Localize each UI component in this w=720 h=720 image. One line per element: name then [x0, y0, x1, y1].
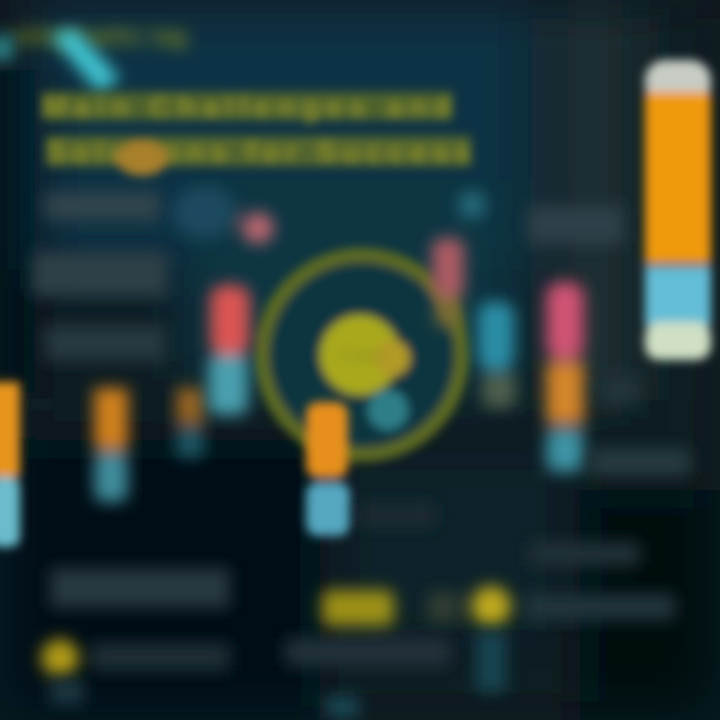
right text block: Summary	[590, 455, 658, 472]
right text block: Outcome notes	[525, 599, 634, 616]
right text block: Details	[528, 219, 577, 236]
pill: pink upper right	[432, 191, 486, 326]
title	[42, 91, 471, 176]
bottom teal marks	[50, 632, 506, 718]
title: Main Challenges and	[42, 91, 452, 124]
left text block: Key factor	[35, 265, 108, 282]
pill: second left	[94, 388, 128, 502]
left text block	[32, 192, 167, 361]
pill: red and teal	[208, 285, 250, 415]
pill: left edge	[0, 382, 20, 547]
right text block	[525, 206, 690, 620]
central ring chart	[262, 255, 462, 455]
pill: small center left	[176, 388, 204, 458]
bottom text block	[50, 503, 450, 671]
pill: blue	[478, 302, 516, 408]
pill: center orange	[306, 402, 350, 536]
bottom text block: Recommended	[285, 644, 394, 661]
dot: pink small	[173, 186, 274, 244]
left text block: Challenge	[45, 195, 117, 212]
icon: teal corner accent	[0, 28, 120, 94]
left text block: Detail	[40, 332, 81, 349]
bottom text block: Next steps	[90, 649, 166, 666]
tag line: Infographic tag	[14, 23, 187, 50]
bottom text block: Impact overview	[50, 579, 166, 596]
central ring chart: Core	[340, 345, 383, 367]
yellow highlights	[41, 586, 511, 677]
pill: top right large	[645, 60, 711, 360]
title: Solutions for Success	[46, 136, 471, 169]
pill: pink orange teal	[546, 282, 584, 472]
